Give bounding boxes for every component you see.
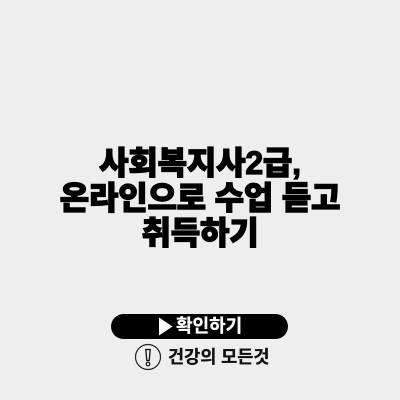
title line 1: 사회복지사2급, <box>99 145 301 181</box>
icon: play triangle <box>159 318 172 336</box>
icon: exclamation circle <box>134 344 162 370</box>
title line 2: 온라인으로 수업 듣고 <box>60 180 340 216</box>
site name: 건강의 모든것 <box>168 347 269 367</box>
title <box>60 145 340 251</box>
button: confirm <box>111 314 288 339</box>
button label: 확인하기 <box>176 316 242 336</box>
title line 3: 취득하기 <box>142 215 258 251</box>
